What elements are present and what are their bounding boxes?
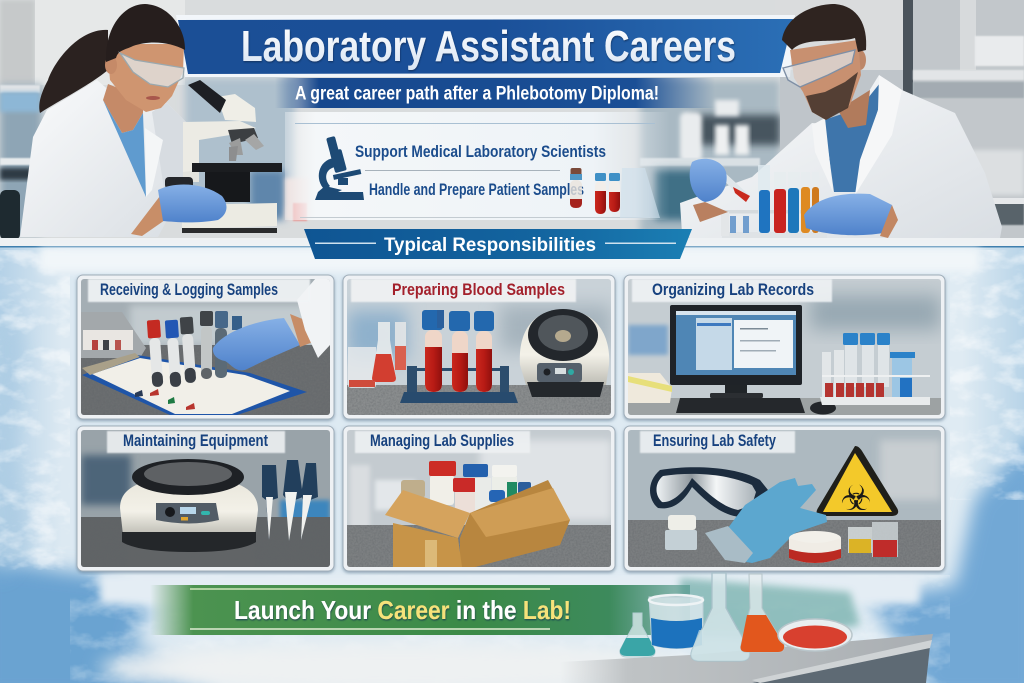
small jar (668, 515, 696, 530)
lips (146, 96, 160, 100)
card label (355, 431, 530, 453)
supply bottles (430, 475, 454, 505)
lab counter edge (0, 238, 1024, 272)
centrifuge (520, 310, 609, 385)
neck (103, 84, 143, 133)
scientist: man with test tubes (680, 4, 1002, 238)
lab coat (680, 75, 1002, 238)
test tube rack held by man (721, 165, 827, 238)
tubes and rack (820, 333, 930, 405)
call-to-action text: Launch Your Career in the Lab! (234, 595, 571, 625)
card: maintaining equipment (77, 426, 334, 571)
icon: blue glove (729, 478, 827, 563)
cardboard box (460, 480, 570, 567)
pipettes (262, 465, 278, 540)
call-to-action banner (150, 578, 860, 640)
card label (640, 431, 795, 453)
glassware (620, 573, 852, 661)
icon: biohazard sign (817, 446, 898, 519)
text: handle samples: Handle and Prepare Patient Samples (369, 180, 584, 199)
icon: biohazard sign: ☣ (840, 479, 872, 519)
gloved hand (213, 318, 300, 370)
red petri dish (778, 619, 852, 651)
computer monitor (670, 305, 802, 385)
small beakers (848, 527, 872, 553)
ear (105, 56, 117, 74)
icon: safety goggles (650, 467, 768, 517)
lab table (560, 634, 933, 683)
orange flask (741, 574, 784, 652)
card label (88, 279, 310, 302)
card: receiving and logging samples (77, 275, 334, 419)
card label (351, 279, 576, 302)
section banner: typical responsibilities (304, 229, 692, 259)
card: managing lab supplies (343, 426, 615, 571)
neck (838, 90, 870, 128)
icon: microscope (315, 136, 364, 200)
face (790, 40, 861, 120)
card label (107, 431, 285, 453)
lab photo background (0, 0, 1024, 240)
page background: brushed blue and white (0, 240, 1024, 683)
ponytail (39, 30, 108, 113)
card label: Maintaining Equipment (123, 432, 268, 450)
card label (632, 279, 832, 302)
lab coat (20, 80, 187, 237)
section heading: Typical Responsibilities (384, 234, 596, 256)
title banner (176, 15, 795, 77)
decorative flask behind tubes (620, 168, 660, 218)
safety glasses (120, 53, 184, 87)
keyboard (676, 398, 805, 413)
mouse (810, 402, 836, 414)
red dish (789, 531, 841, 543)
white info panel (285, 112, 670, 220)
ear (854, 50, 866, 70)
hair (782, 4, 866, 52)
paper stack (628, 373, 672, 403)
rack (407, 366, 417, 394)
microscope photo (165, 80, 282, 233)
forearm (131, 196, 165, 236)
card label: Ensuring Lab Safety (653, 432, 777, 450)
text: support scientists: Support Medical Laboratory Scientists (355, 142, 606, 161)
title text: Laboratory Assistant Careers (241, 22, 736, 71)
card: organizing lab records (624, 275, 945, 419)
centrifuge (120, 484, 258, 532)
icon: blood tubes (570, 168, 620, 214)
card: ensuring lab safety (624, 426, 945, 571)
man's gloved hands and red tube (690, 159, 898, 238)
beard (806, 72, 858, 120)
subtitle band (275, 78, 715, 108)
right lapel (145, 128, 163, 197)
beakers and flasks (348, 347, 376, 388)
subtitle text: A great career path after a Phlebotomy Diploma! (295, 84, 659, 104)
tray of tubes (81, 312, 146, 358)
hair (106, 4, 185, 62)
blue beaker (649, 597, 703, 648)
clear flask (691, 573, 750, 661)
woman's gloved hand (158, 184, 227, 222)
teal flask (620, 613, 655, 657)
sample tubes (215, 311, 228, 328)
scientist: woman at microscope (20, 4, 187, 237)
clipboard (82, 355, 307, 415)
face (108, 44, 184, 112)
card label: Preparing Blood Samples (392, 281, 565, 299)
lapels (812, 118, 833, 192)
safety glasses (783, 50, 855, 87)
shirt (103, 100, 146, 197)
card label: Managing Lab Supplies (370, 432, 514, 450)
card: preparing blood samples (343, 275, 615, 419)
blood tubes (422, 310, 443, 330)
card label: Organizing Lab Records (652, 281, 814, 299)
card label: Receiving & Logging Samples (100, 281, 278, 299)
shirt (824, 78, 884, 192)
